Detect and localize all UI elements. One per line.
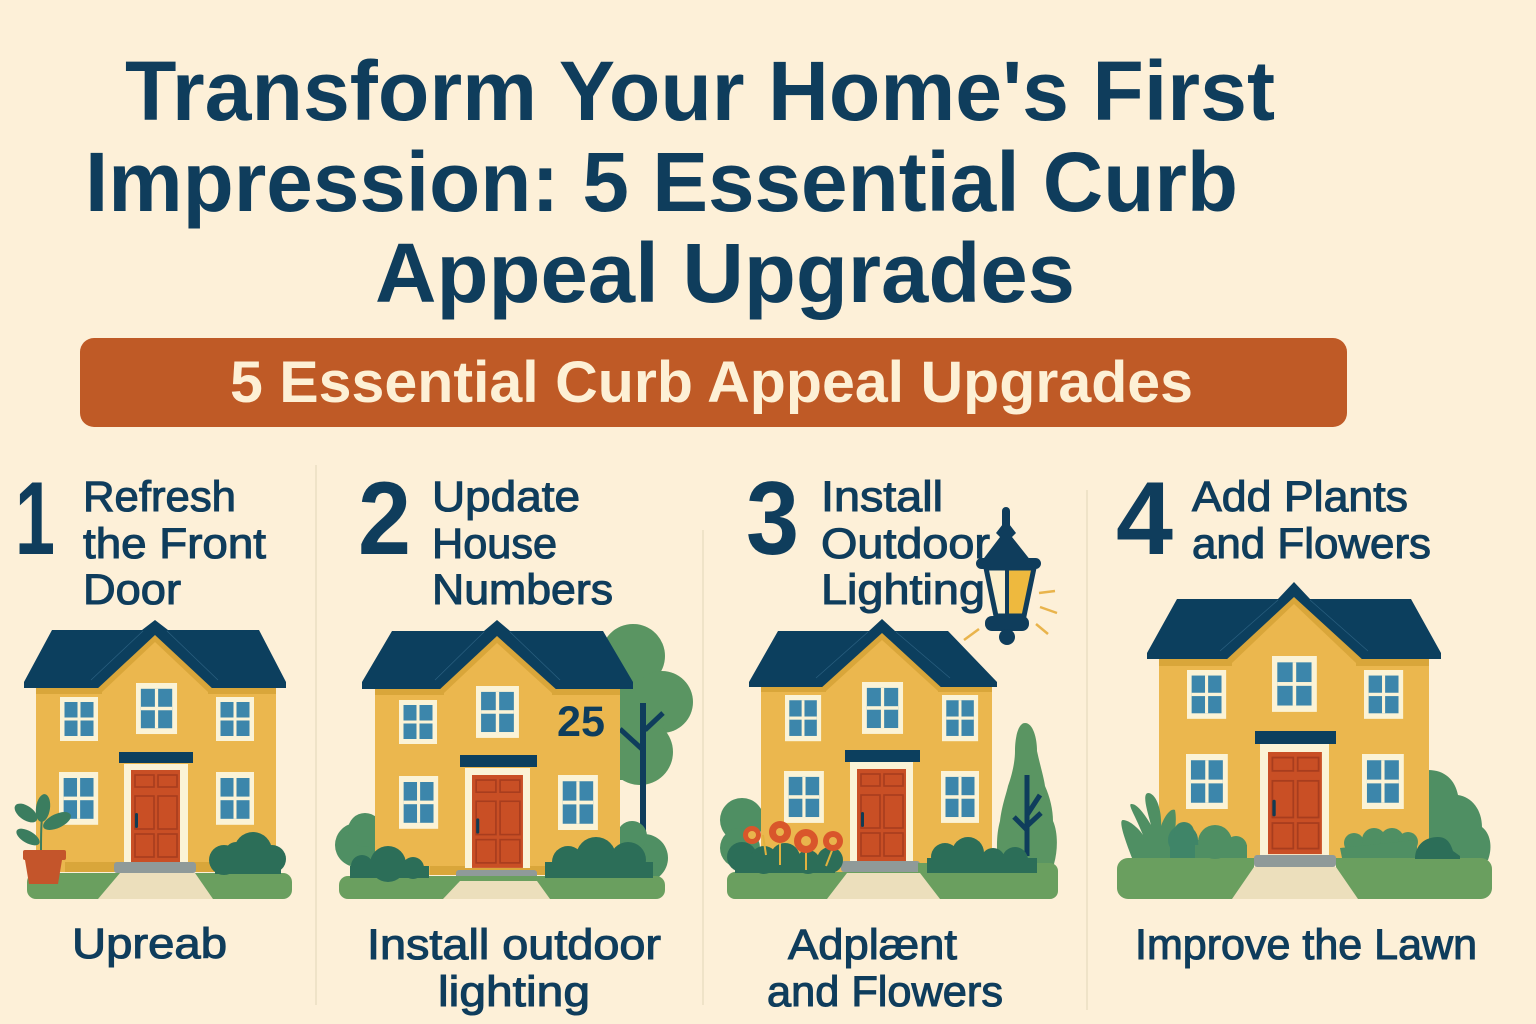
step 4 heading: Add Plants [1192,473,1408,521]
house 2 [362,620,633,881]
step 2 heading: Numbers [432,566,613,614]
step 4 number: 4 [1116,461,1173,577]
step 1 heading: Door [83,566,181,614]
caption 4: Improve the Lawn [1135,921,1477,969]
lawn 1 [27,873,292,899]
shrubs 2 [350,837,653,882]
back shrubs 2 [335,813,668,882]
title: Appeal Upgrades [375,226,1075,320]
step 1 number: 1 [15,461,55,577]
lawn 4 [1117,858,1492,899]
title: Impression: 5 Essential Curb [85,135,1238,229]
step 3 heading: Outdoor [821,520,990,568]
panel: step 1 [11,461,292,968]
flowers [727,821,843,874]
plants 4 [1121,793,1460,859]
shrub 3 [927,837,1037,873]
banner: 5 Essential Curb Appeal Upgrades [230,350,1193,415]
icon: lantern [964,507,1057,645]
panel: step 2 [335,461,693,1016]
step 2 number: 2 [358,461,411,577]
step 3 number: 3 [746,461,799,577]
back shrub 3 [720,798,764,868]
lawn 3 [727,863,1058,899]
step 2 heading: Update [432,473,580,521]
house 3 [749,619,997,872]
back shrub 4 [1428,770,1490,860]
step 1 heading [83,473,266,614]
house 4 [1147,582,1441,867]
panel: step 3 [720,461,1058,1016]
caption 2: Install outdoor [367,921,661,969]
panel: step 4 [1116,461,1492,969]
step 4 heading: and Flowers [1192,520,1431,568]
step 3 heading [821,473,990,614]
house 1 [24,620,286,873]
step 2 heading [432,473,613,614]
step 2 heading: House [432,520,557,568]
title: Transform Your Home's First [125,44,1275,138]
title [85,44,1275,320]
step 3 heading: Install [821,473,943,521]
step 1 heading: Refresh [83,473,236,521]
potted plant [11,793,74,884]
caption 3: Adplænt [788,921,957,969]
caption 3 [767,921,1003,1016]
house number: 25 [557,698,605,746]
caption 2: lighting [438,968,590,1016]
step 4 heading [1192,473,1431,568]
banner [80,338,1347,427]
caption 1: Upreab [72,920,227,968]
tree 2 [601,624,693,837]
caption 3: and Flowers [767,968,1003,1016]
caption 2 [367,921,661,1016]
lawn 2 [339,876,665,899]
step 1 heading: the Front [83,520,266,568]
shrub 1 [209,832,286,875]
step 3 heading: Lighting [821,566,985,614]
tree 3 [997,723,1057,864]
